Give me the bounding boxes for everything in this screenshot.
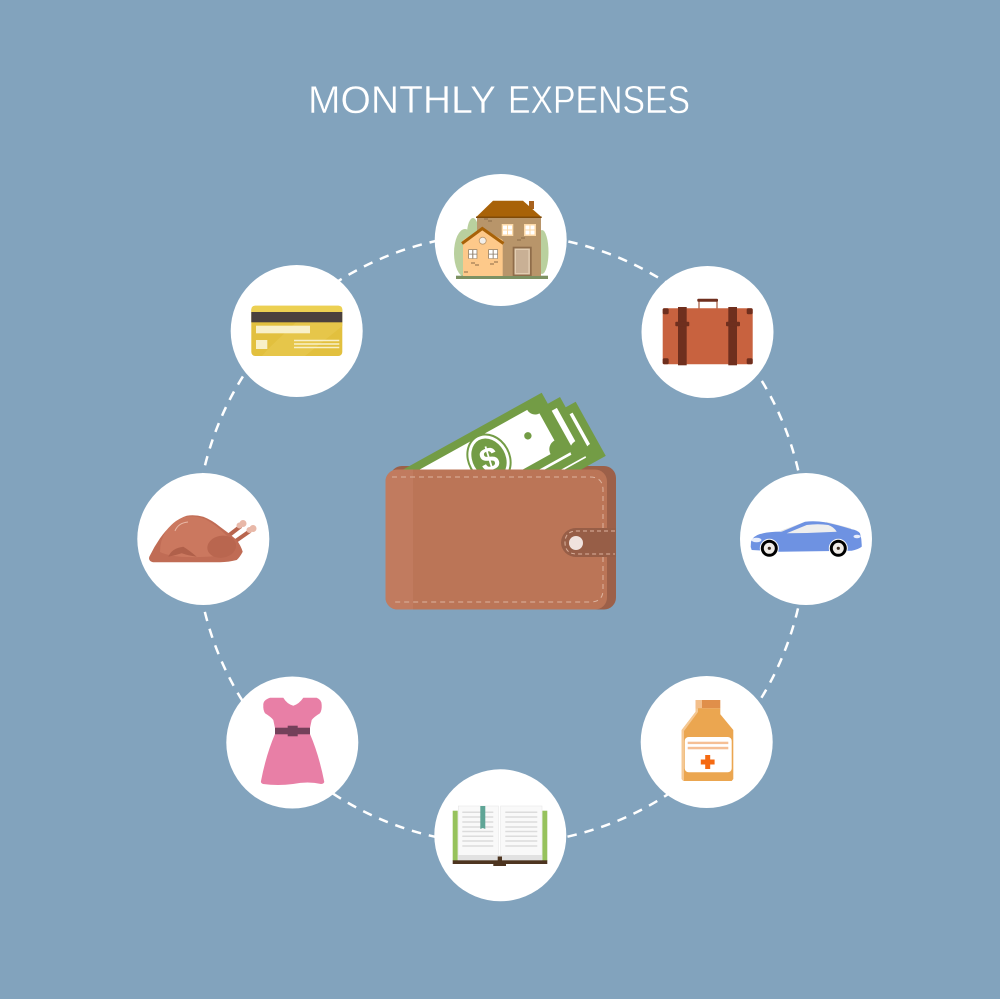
dashed ring connecting the categories xyxy=(196,234,806,844)
white disc xyxy=(231,265,363,397)
icon: credit card xyxy=(251,306,342,356)
white disc xyxy=(642,266,774,398)
category: medicine xyxy=(641,676,773,808)
wallet front panel xyxy=(386,470,607,610)
wallet strap and snap button xyxy=(561,528,616,557)
category: credit card xyxy=(231,265,363,397)
wallet back panel xyxy=(390,466,616,610)
icon: suitcase xyxy=(663,299,753,365)
banknotes xyxy=(393,393,606,538)
title xyxy=(308,79,690,122)
middle banknote xyxy=(411,397,591,535)
category: books xyxy=(434,769,566,901)
category: food xyxy=(137,473,269,605)
white disc xyxy=(226,676,358,808)
back banknote xyxy=(427,402,606,538)
icon: wallet with banknotes xyxy=(386,393,616,610)
front banknote: $ xyxy=(475,439,503,479)
category: clothes xyxy=(226,676,358,808)
white disc xyxy=(137,473,269,605)
icon: car xyxy=(751,521,862,558)
white disc xyxy=(740,473,872,605)
category: suitcase xyxy=(642,266,774,398)
white disc xyxy=(435,174,567,306)
white disc xyxy=(434,769,566,901)
icon: medicine bottle xyxy=(682,700,733,781)
category: house xyxy=(435,174,567,306)
front banknote xyxy=(393,393,574,533)
icon: open book xyxy=(453,806,547,866)
category: car xyxy=(740,473,872,605)
icon: roast turkey xyxy=(149,515,256,562)
icon: house xyxy=(454,201,548,279)
icon: dress xyxy=(261,698,324,785)
title: EXPENSES xyxy=(508,79,690,122)
white disc xyxy=(641,676,773,808)
title: MONTHLY xyxy=(308,79,496,122)
